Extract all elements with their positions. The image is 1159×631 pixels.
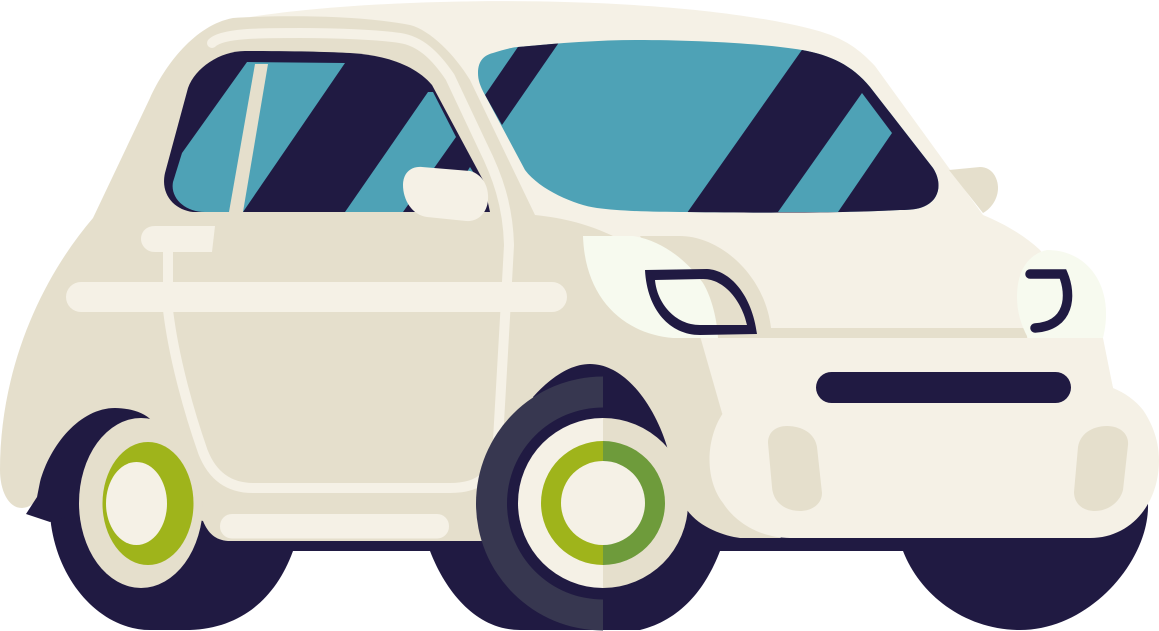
front far tire (903, 500, 1148, 630)
underbody strip (280, 500, 910, 551)
bumper (703, 338, 1159, 538)
tires and underbody (50, 500, 1148, 630)
body: cream front and roof (250, 1, 1113, 538)
windshield glass teal (478, 40, 938, 213)
side window (164, 51, 490, 212)
door outline (168, 33, 509, 488)
front near tire (430, 500, 720, 630)
side window glass dark (164, 51, 490, 212)
belt trim bar (66, 282, 567, 312)
rear wheel hub (106, 462, 167, 545)
front wheel arch (533, 364, 668, 503)
right headlight glow (1017, 250, 1106, 338)
body: beige side (0, 16, 780, 541)
far side mirror (949, 167, 998, 213)
hub (561, 461, 645, 545)
left headlight housing shadow (640, 236, 1027, 338)
windshield dark stripe left (485, 41, 560, 125)
rear wheel rim (79, 418, 203, 588)
rear wheel green ring (102, 442, 194, 565)
grille slot (816, 372, 1071, 403)
left fog lamp (768, 426, 822, 511)
door pillar (229, 64, 268, 212)
side window reflection left (173, 62, 345, 212)
tire inner ring (507, 408, 603, 600)
rear wheel (79, 418, 203, 588)
rim right half (603, 418, 688, 588)
windshield reflection right (778, 93, 892, 212)
side window reflection right (345, 92, 456, 212)
windshield (478, 40, 938, 213)
left headlight glow (583, 236, 718, 338)
rim left half (518, 418, 603, 588)
right fog lamp (1074, 426, 1128, 511)
rear tire (50, 500, 293, 630)
side mirror (403, 167, 488, 221)
tire left half outer (476, 376, 603, 630)
windshield dark area right (688, 50, 938, 213)
right headlight outline (1030, 274, 1068, 328)
green ring left half (541, 441, 603, 565)
green ring right half (603, 441, 665, 565)
front near wheel (476, 376, 688, 630)
side window reflection small (465, 167, 475, 175)
side sill (220, 514, 449, 538)
door handle (141, 226, 215, 252)
rear wheel arch (26, 408, 151, 522)
left headlight outline (645, 269, 757, 335)
